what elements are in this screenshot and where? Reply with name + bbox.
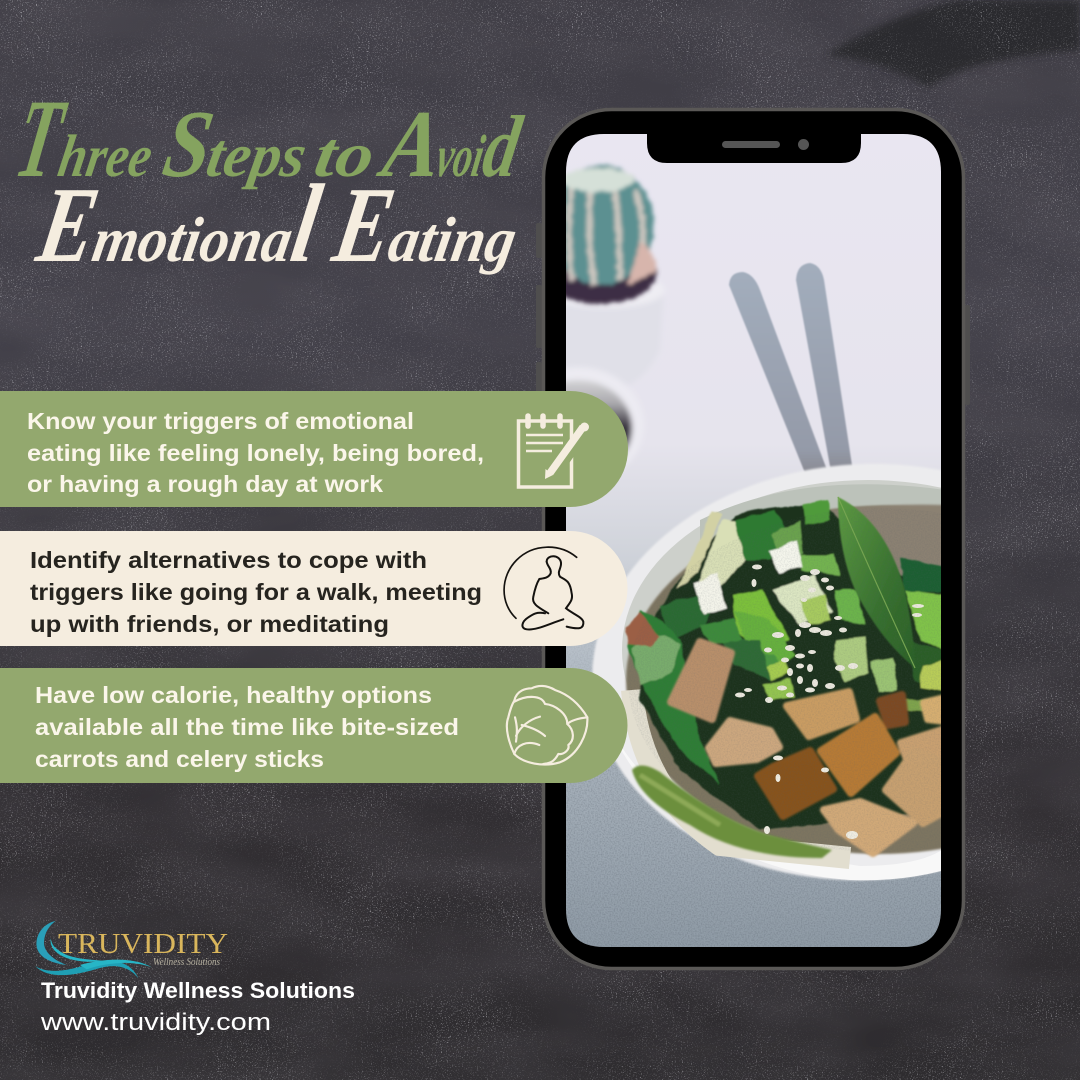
notch speaker bbox=[722, 141, 780, 148]
step 1 text: or having a rough day at work bbox=[27, 471, 384, 497]
title line 1: S bbox=[156, 91, 221, 197]
icon: meditating figure bbox=[504, 547, 583, 629]
title line 2: motiona bbox=[88, 204, 298, 275]
title line 1: teps bbox=[202, 120, 312, 190]
phone side buttons bbox=[536, 223, 970, 422]
title line 1: to bbox=[310, 119, 380, 190]
bamboo strips bbox=[677, 512, 748, 590]
food photo on screen bbox=[566, 134, 941, 947]
panel: step 2 alternatives bbox=[0, 531, 628, 646]
step 1 text: Know your triggers of emotional bbox=[27, 408, 414, 434]
title bbox=[8, 77, 529, 286]
step 1 text: eating like feeling lonely, being bored, bbox=[27, 440, 484, 466]
leaf bbox=[838, 497, 915, 668]
logo: Truvidity bbox=[35, 921, 228, 978]
website: www.truvidity.com bbox=[40, 1009, 271, 1036]
step 3 text: carrots and celery sticks bbox=[35, 746, 324, 772]
white pieces bbox=[693, 573, 727, 615]
step 2 text: Identify alternatives to cope with bbox=[30, 547, 427, 573]
panel: step 3 healthy options bbox=[0, 668, 628, 783]
second pot bbox=[566, 368, 635, 452]
tofu pieces bbox=[671, 642, 945, 853]
title line 2: E bbox=[325, 165, 403, 285]
step 3 text: available all the time like bite-sized bbox=[35, 714, 459, 740]
title line 1: voi bbox=[432, 123, 489, 190]
food bbox=[626, 500, 945, 830]
step 2 text bbox=[30, 547, 482, 637]
snow pea left bbox=[628, 610, 720, 785]
sesame seeds bbox=[735, 564, 924, 703]
snow pea bottom bbox=[632, 765, 832, 858]
logo swoosh bbox=[35, 921, 152, 978]
title line 1: hree bbox=[54, 123, 157, 190]
title line 2: l bbox=[284, 162, 330, 286]
step 2 text: up with friends, or meditating bbox=[30, 611, 389, 637]
title line 2 bbox=[29, 162, 522, 286]
notch camera bbox=[798, 139, 809, 150]
step 2 text: triggers like going for a walk, meeting bbox=[30, 579, 482, 605]
meat piece bbox=[626, 612, 660, 647]
logo tagline: Wellness Solutions bbox=[153, 957, 220, 968]
title line 1: d bbox=[477, 99, 529, 196]
logo wordmark: TRUVIDITY bbox=[58, 928, 228, 960]
step 3 text: Have low calorie, healthy options bbox=[35, 682, 432, 708]
panel: step 1 triggers bbox=[0, 391, 628, 507]
title line 1 bbox=[8, 77, 529, 201]
chopsticks bbox=[728, 262, 852, 472]
cactus bbox=[566, 162, 660, 308]
green vegetables bbox=[735, 510, 792, 560]
icon: notepad and pencil bbox=[518, 416, 589, 487]
title line 2: ating bbox=[384, 204, 522, 275]
phone mockup bbox=[536, 108, 970, 970]
noodles bbox=[632, 690, 850, 858]
step 3 text bbox=[35, 682, 459, 772]
icon: cabbage bbox=[507, 686, 587, 764]
seeds on tofu bbox=[764, 756, 858, 839]
dark greens base bbox=[640, 506, 945, 830]
title line 1: T bbox=[8, 77, 74, 201]
title line 1: A bbox=[372, 91, 451, 197]
company name: Truvidity Wellness Solutions bbox=[41, 978, 355, 1003]
step 1 text bbox=[27, 408, 484, 497]
bowl bbox=[591, 463, 941, 882]
title line 2: E bbox=[29, 165, 107, 285]
cactus pot bbox=[639, 290, 660, 300]
phone body bbox=[544, 110, 964, 968]
